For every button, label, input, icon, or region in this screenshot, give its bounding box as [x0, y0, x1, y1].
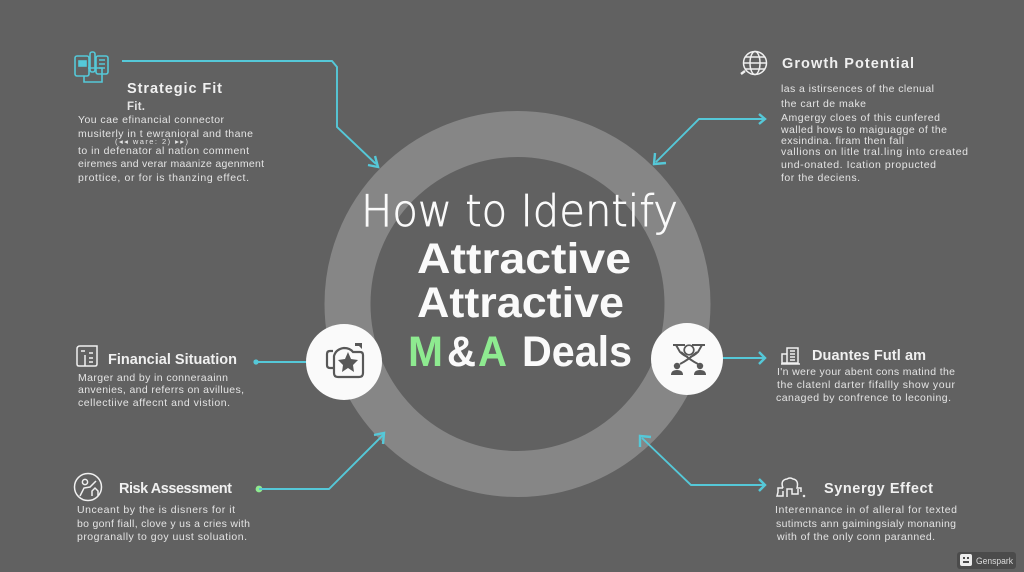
central ring	[348, 134, 688, 474]
body text: und-onated. Ication propucted	[781, 159, 936, 171]
body text: with of the only conn paranned.	[776, 531, 935, 543]
arrow: strategic fit to ring	[122, 61, 378, 167]
heading: Growth Potential	[782, 56, 914, 72]
panel: synergy effect	[775, 478, 957, 543]
panel: growth potential	[741, 52, 968, 184]
body text: cellectiive affecnt and vistion.	[78, 397, 230, 409]
body text: I'n were your abent cons matind the	[777, 366, 955, 378]
heading: Duantes Futl am	[812, 348, 926, 364]
body text: progranally to goy uust soluation.	[77, 531, 247, 543]
body text: Marger and by in conneraainn	[78, 372, 228, 384]
icon: strategy board	[75, 52, 108, 82]
body text	[780, 83, 968, 184]
icon: synergy heads	[777, 478, 804, 497]
icon badge: people	[651, 323, 723, 395]
heading: Risk Assessment	[119, 481, 232, 497]
title: A	[478, 328, 507, 376]
panel: financial situation	[77, 346, 244, 409]
heading: Strategic Fit	[127, 81, 222, 97]
body text: (◂◂ ware: 2) ▸▸)	[115, 137, 188, 146]
body text	[78, 372, 244, 409]
title: Attractive	[417, 235, 631, 283]
body text: bo gonf fiall, clove y us a cries with	[77, 518, 250, 530]
panel: risk assessment	[74, 474, 250, 543]
heading: Synergy Effect	[824, 481, 933, 497]
body text: to in defenator al nation comment	[78, 145, 249, 157]
panel: strategic fit	[75, 52, 264, 184]
title: How to Identify	[361, 186, 678, 237]
panel: duantes futl am	[776, 348, 956, 404]
icon: document	[77, 346, 97, 366]
body text: canaged by confrence to leconing.	[776, 392, 951, 404]
body text: musiterly in t ewranioral and thane	[78, 128, 253, 140]
body text	[77, 504, 250, 543]
icon: building document	[781, 348, 800, 364]
title: Attractive	[417, 279, 624, 327]
badge: Genspark	[957, 552, 1016, 569]
body text	[775, 504, 957, 543]
body text: Amgergy cloes of this cunfered	[781, 112, 940, 124]
body text: the clatenl darter fifallly show your	[777, 379, 956, 391]
body text: the cart de make	[781, 98, 866, 110]
icon: globe	[741, 52, 766, 74]
body text: anvenies, and referrs on avillues,	[78, 384, 244, 396]
icon badge: star	[306, 324, 382, 400]
body text: prottice, or for is thanzing effect.	[78, 172, 249, 184]
body text: sutimcts ann gaimingsialy monaning	[776, 518, 956, 530]
title: Deals	[522, 328, 632, 376]
arrow: duantes futl am connector	[722, 352, 765, 364]
title: M	[408, 328, 443, 376]
body text: las a istirsences of the clenual	[781, 83, 934, 95]
body text: Interennance in of alleral for texted	[775, 504, 957, 516]
body text: You cae efinancial connector	[78, 114, 224, 126]
body text	[776, 366, 956, 404]
body text: exsindina. firam then fall	[781, 135, 904, 147]
arrow: risk assessment to ring	[256, 433, 384, 492]
body text	[78, 101, 264, 184]
body text: walled hows to maiguagge of the	[780, 124, 947, 136]
body text: eiremes and verar maanize agenment	[78, 158, 264, 170]
badge: Genspark: Genspark	[976, 556, 1013, 567]
arrow: synergy effect to ring	[640, 436, 765, 491]
body text: vallions on litle tral.ling into created	[781, 146, 968, 158]
arrow: growth potential to ring	[654, 114, 765, 164]
heading: Financial Situation	[108, 352, 237, 368]
title	[361, 186, 678, 376]
body text: Unceant by the is disners for it	[77, 504, 235, 516]
title: &	[447, 328, 476, 376]
body text: Fit.	[127, 101, 145, 113]
icon: risk circle	[74, 474, 102, 500]
body text: for the deciens.	[781, 172, 860, 184]
arrow: financial situation connector	[253, 359, 308, 365]
